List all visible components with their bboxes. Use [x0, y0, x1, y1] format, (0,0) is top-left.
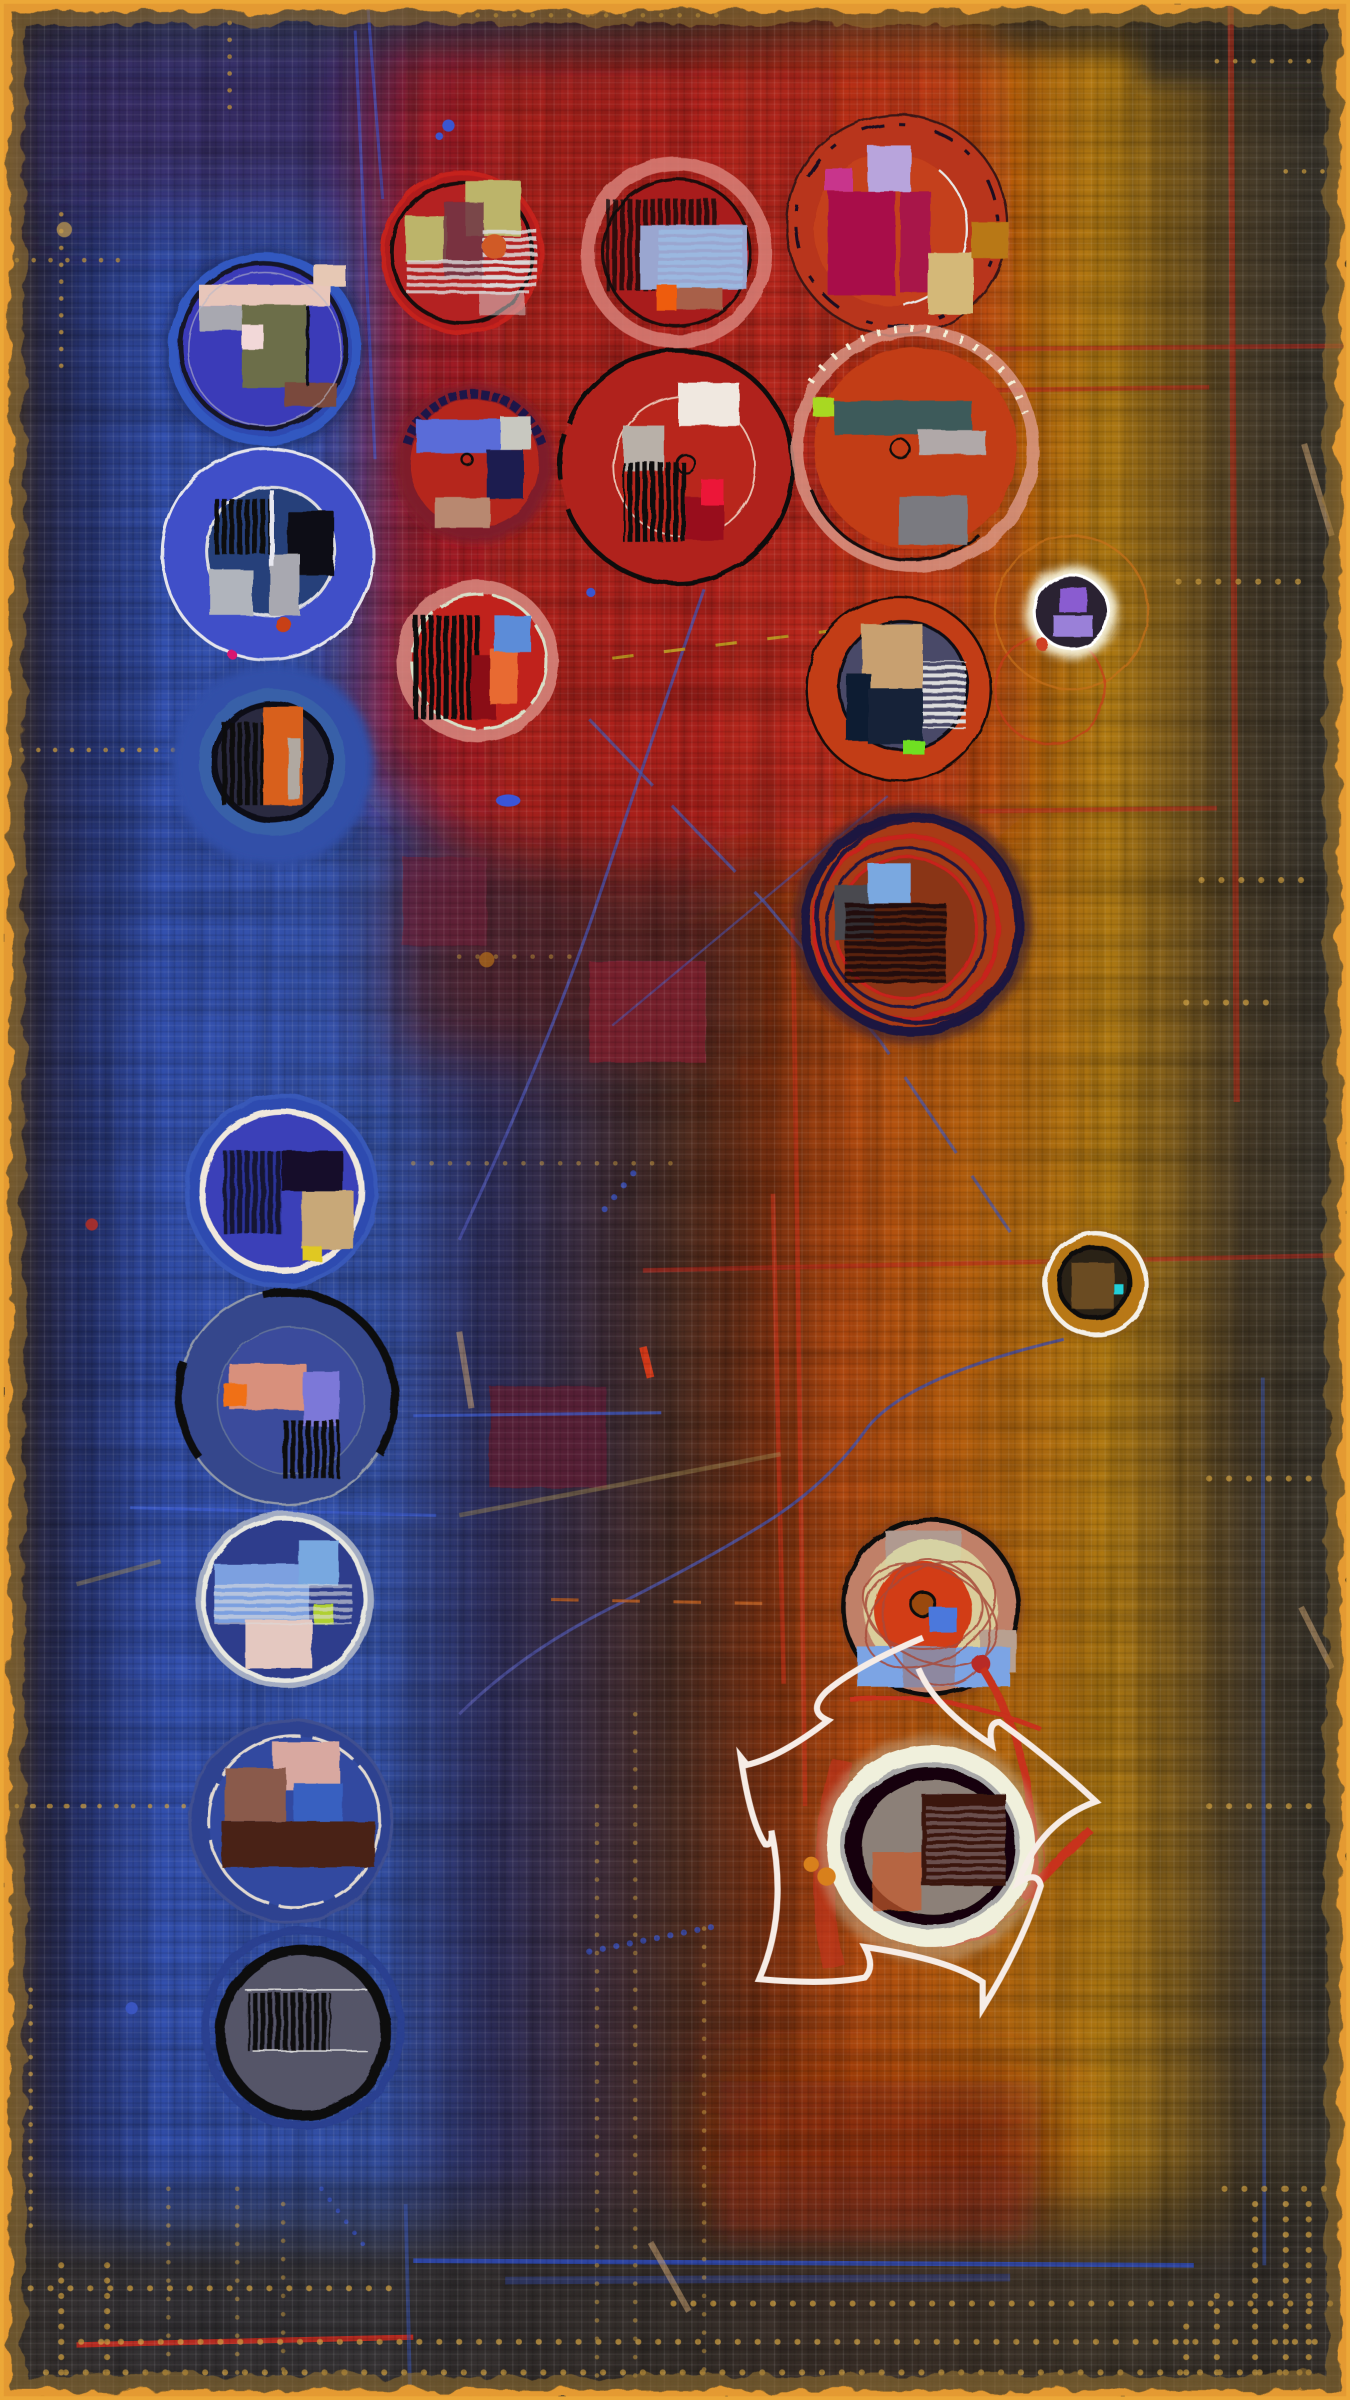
circle: blue top left — [164, 248, 366, 450]
circle: black ring grey centre — [205, 1930, 401, 2126]
circle: pink ring with stripes — [396, 580, 559, 742]
shape: white hand-drawn outline — [741, 1638, 1096, 2008]
circle: black arc salmon patch — [179, 1290, 395, 1505]
circle: large orange pink ring — [797, 328, 1033, 566]
artwork circles — [162, 115, 1151, 2126]
circle: red with olive patches — [383, 173, 542, 332]
circle: pale blue stripes with lime — [196, 1511, 373, 1688]
circle: orange with tan and navy stripes — [807, 597, 990, 781]
circle: orange with magenta patches — [787, 115, 1009, 335]
background: dark red squares — [403, 857, 706, 1488]
circle: large white ring dark centre — [817, 1736, 1044, 1962]
circle: blue fringed with orange stripes — [171, 664, 373, 866]
circle: dark-fringed red with periwinkle patch — [395, 384, 554, 543]
circle: white ring navy and tan — [187, 1096, 377, 1286]
circle: blue with brown band — [190, 1720, 392, 1922]
circle: small white with purple — [995, 536, 1148, 744]
circle: navy with red scribbles — [793, 805, 1032, 1044]
circle: salmon with scribbles — [839, 1515, 1022, 1701]
scattered blue and orange dots — [57, 119, 836, 2014]
red strokes behind lower circle — [824, 1668, 1090, 1967]
circle: pink ring with blue-grey patch — [588, 164, 765, 341]
circle: small white ring — [1041, 1229, 1151, 1339]
circle: large red black arc — [560, 351, 793, 583]
circle: blue ring white edge — [162, 448, 373, 660]
